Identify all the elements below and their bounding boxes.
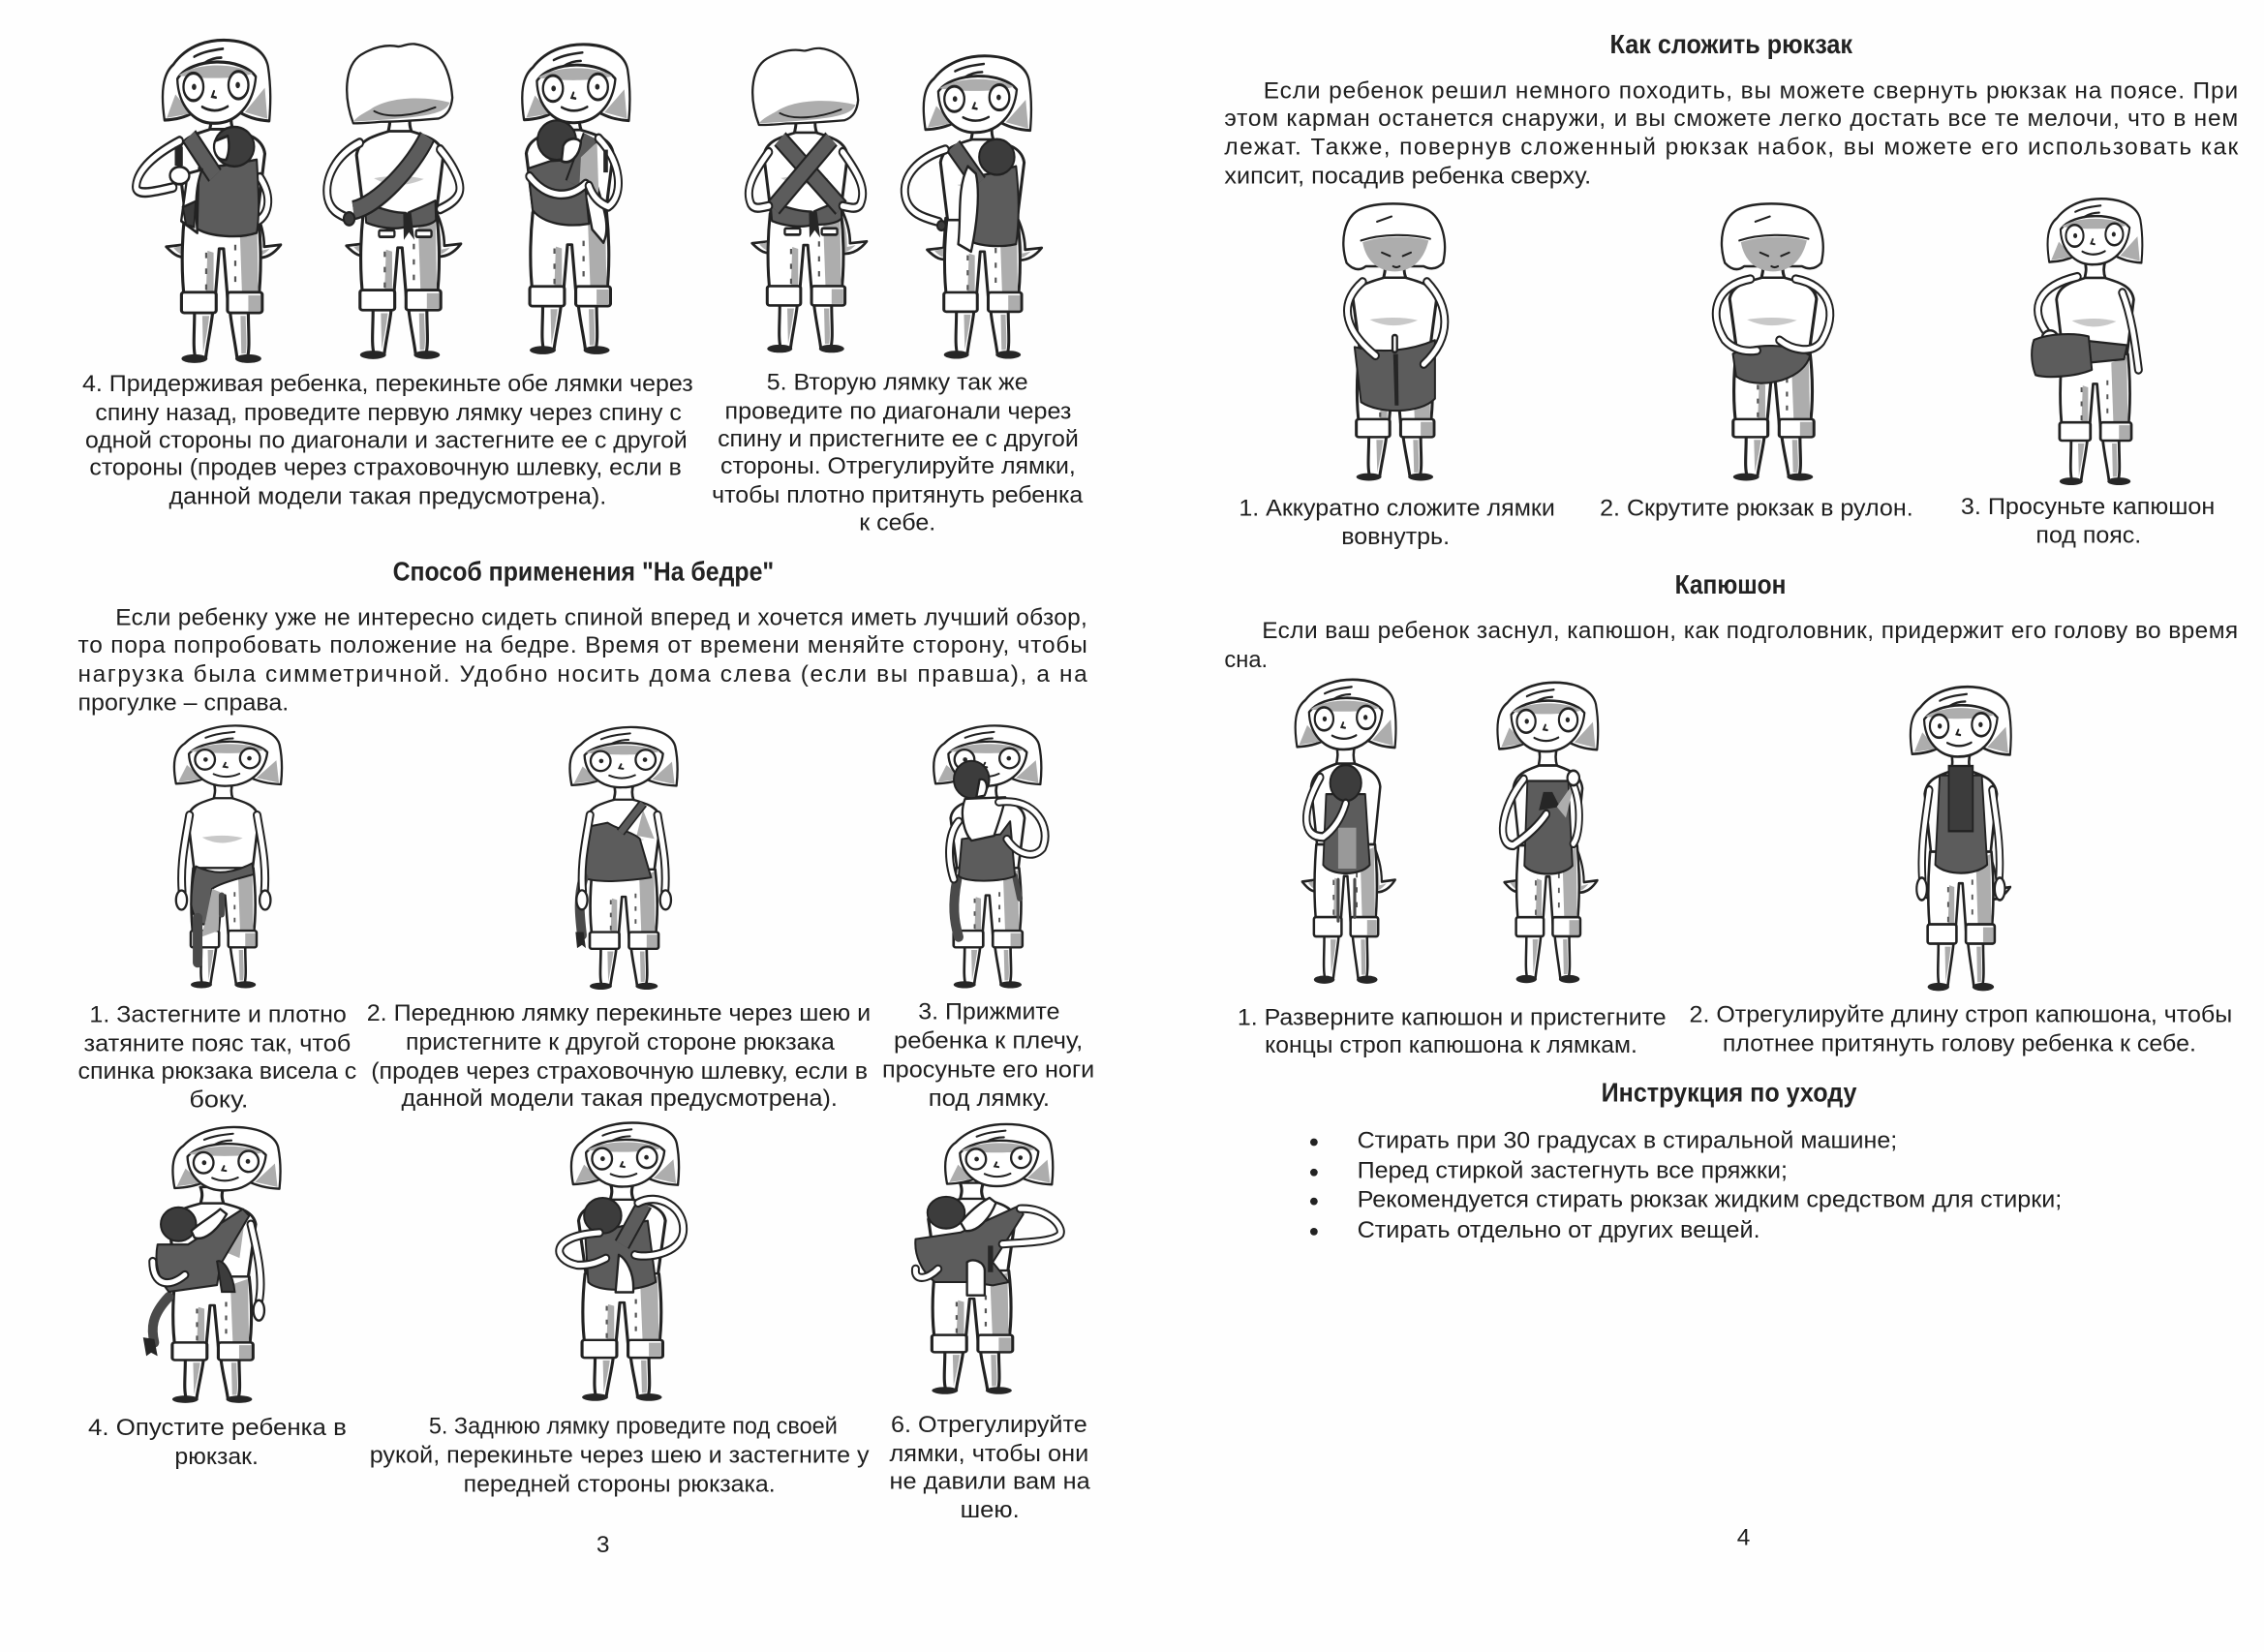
caption: hip step 4: рюкзак. <box>174 1444 259 1470</box>
page number 3: 3 <box>597 1532 609 1558</box>
figure: hip step 4, lowering baby into carrier <box>143 1127 281 1403</box>
text block: fold intro: Если ребенок решил немного походить, вы можете свернуть рюкзак на поясе. При <box>1264 77 2238 104</box>
caption: hip step 3: просуньте его ноги <box>882 1056 1094 1083</box>
caption: hip step 6: шею. <box>961 1497 1020 1523</box>
caption: step 5 (top): 5. Вторую лямку так же <box>767 370 1028 396</box>
text block: hip method intro: Если ребенку уже не интересно сидеть спиной вперед и хочется иметь лучший обзор, <box>115 605 1087 631</box>
heading: how to fold: Как сложить рюкзак <box>1610 29 1852 59</box>
caption: hip step 3: ребенка к плечу, <box>894 1028 1083 1055</box>
text block: fold intro: этом карман останется снаружи, и вы сможете легко достать все те мелочи, что в нем <box>1224 106 2238 132</box>
text block: hip method intro <box>78 605 1087 717</box>
text block: hood intro: Если ваш ребенок заснул, капюшон, как подголовник, придержит его голову во время <box>1262 618 2238 644</box>
caption: step 4 (top): 4. Придерживая ребенка, перекиньте обе лямки через <box>82 371 693 397</box>
list: care instructions: Перед стиркой застегнуть все пряжки; <box>1358 1158 1788 1184</box>
caption: hood step 2: 2. Отрегулируйте длину строп капюшона, чтобы <box>1690 1002 2232 1028</box>
caption: hip step 1: затяните пояс так, чтоб <box>83 1031 351 1057</box>
heading: hood: Капюшон <box>1675 569 1786 599</box>
caption: hip step 1: спинка рюкзака висела с <box>78 1058 356 1085</box>
text block: hip method intro: то пора попробовать положение на бедре. Время от времени меняйте сторону, чтобы <box>78 632 1087 658</box>
caption: hip step 5: передней стороны рюкзака. <box>464 1471 776 1497</box>
figure: step 4 front, baby on chest <box>137 40 281 363</box>
figure: step 4 side, baby carried left <box>522 45 629 354</box>
caption: fold step 3 <box>1961 494 2215 549</box>
caption: hip step 1: 1. Застегните и плотно <box>89 1002 347 1028</box>
figure: step 4 back view, one diagonal strap <box>327 44 461 359</box>
list: care instructions <box>1310 1127 2062 1243</box>
caption: hip step 6: не давили вам на <box>889 1468 1090 1494</box>
page number 4: 4 <box>1737 1524 1750 1550</box>
heading: care instructions: Инструкция по уходу <box>1602 1078 1857 1108</box>
figure: hip step 3, baby on shoulder <box>933 725 1045 989</box>
caption: hip step 6: 6. Отрегулируйте <box>891 1412 1087 1438</box>
caption: hip step 3: под лямку. <box>929 1086 1050 1112</box>
caption: hood step 1 <box>1238 1005 1667 1058</box>
caption: fold step 3: 3. Просуньте капюшон <box>1961 494 2215 520</box>
caption: fold step 1: 1. Аккуратно сложите лямки <box>1239 495 1555 521</box>
text block: hip method intro: прогулке – справа. <box>78 690 289 717</box>
figure: hip step 6, adjusting straps <box>915 1124 1060 1394</box>
caption: step 4 (top): одной стороны по диагонали и застегните ее с другой <box>85 427 688 453</box>
caption: hood step 2 <box>1690 1002 2232 1057</box>
caption: step 5 (top): стороны. Отрегулируйте лямки, <box>720 453 1076 479</box>
caption: fold step 2: 2. Скрутите рюкзак в рулон. <box>1600 495 1913 521</box>
caption: fold step 1 <box>1239 495 1555 550</box>
caption: step 4 (top): данной модели такая предусмотрена). <box>168 483 606 509</box>
caption: hip step 2: 2. Переднюю лямку перекиньте через шею и <box>367 1000 871 1026</box>
caption: hood step 1: концы строп капюшона к лямкам. <box>1265 1032 1637 1058</box>
caption: hip step 2: данной модели такая предусмотрена). <box>402 1086 838 1112</box>
figure: hip step 1, belt with carrier hanging at side <box>174 725 282 989</box>
caption: hip step 1: боку. <box>189 1087 248 1114</box>
text block: fold intro: лежат. Также, повернув сложенный рюкзак набок, вы можете его использовать как <box>1224 135 2238 161</box>
caption: hip step 5: рукой, перекиньте через шею и застегните у <box>370 1442 870 1468</box>
caption: hood step 2: плотнее притянуть голову ребенка к себе. <box>1723 1031 2196 1057</box>
figure: fold step 2 <box>1716 203 1830 480</box>
caption: step 5 (top): чтобы плотно притянуть ребенка <box>712 482 1084 508</box>
list: care instructions: Стирать при 30 градусах в стиральной машине; <box>1358 1127 1897 1153</box>
list: care instructions: Рекомендуется стирать рюкзак жидким средством для стирки; <box>1358 1187 2062 1213</box>
caption: hip step 3 <box>882 999 1094 1112</box>
caption: hip step 5 <box>370 1414 870 1497</box>
caption: hip step 2 <box>367 1000 871 1112</box>
caption: step 5 (top): к себе. <box>859 509 935 535</box>
figure: hood step 1a <box>1296 680 1396 984</box>
caption: hip step 6: лямки, чтобы они <box>889 1441 1088 1467</box>
caption: fold step 1: вовнутрь. <box>1341 524 1450 550</box>
text block: fold intro <box>1224 77 2238 189</box>
figure: hip step 5, back strap under arm <box>560 1122 684 1401</box>
text block: fold intro: хипсит, посадив ребенка сверху. <box>1224 163 1591 189</box>
figure: fold step 1 <box>1343 203 1445 480</box>
caption: hip step 3: 3. Прижмите <box>918 999 1059 1025</box>
caption: hip step 2: пристегните к другой стороне рюкзака <box>406 1029 835 1055</box>
caption: step 5 (top) <box>712 370 1084 535</box>
caption: hip step 4: 4. Опустите ребенка в <box>88 1415 347 1441</box>
caption: hood step 1: 1. Разверните капюшон и пристегните <box>1238 1005 1667 1031</box>
text block: hood intro: сна. <box>1224 647 1268 673</box>
caption: hip step 6 <box>889 1412 1090 1523</box>
figure: step 5 side, baby in carrier <box>904 56 1042 359</box>
figure: step 5 back view, crossed straps <box>749 48 867 352</box>
figure: hood step 2 <box>1911 687 2011 991</box>
figure: hood step 1b <box>1497 683 1598 983</box>
caption: step 4 (top): стороны (продев через страховочную шлевку, если в <box>89 455 682 481</box>
caption: hip step 4 <box>88 1415 347 1470</box>
caption: hip step 5: 5. Заднюю лямку проведите под своей <box>429 1414 838 1440</box>
caption: step 5 (top): проведите по диагонали через <box>725 398 1071 424</box>
caption: step 4 (top): спину назад, проведите первую лямку через спину с <box>95 400 682 426</box>
heading: hip method: Способ применения "На бедре" <box>393 556 774 586</box>
caption: step 5 (top): спину и пристегните ее с другой <box>718 426 1079 452</box>
figure: fold step 3 <box>2032 199 2142 485</box>
caption: step 4 (top) <box>82 371 693 509</box>
figure: hip step 2, strap over neck <box>569 727 678 990</box>
text block: hood intro <box>1224 618 2238 673</box>
caption: fold step 3: под пояс. <box>2035 523 2141 549</box>
caption: hip step 2: (продев через страховочную шлевку, если в <box>371 1058 868 1085</box>
list: care instructions: Стирать отдельно от других вещей. <box>1358 1217 1760 1243</box>
text block: hip method intro: нагрузка была симметричной. Удобно носить дома слева (если вы правша), а на <box>78 661 1087 688</box>
caption: hip step 1 <box>78 1002 356 1114</box>
